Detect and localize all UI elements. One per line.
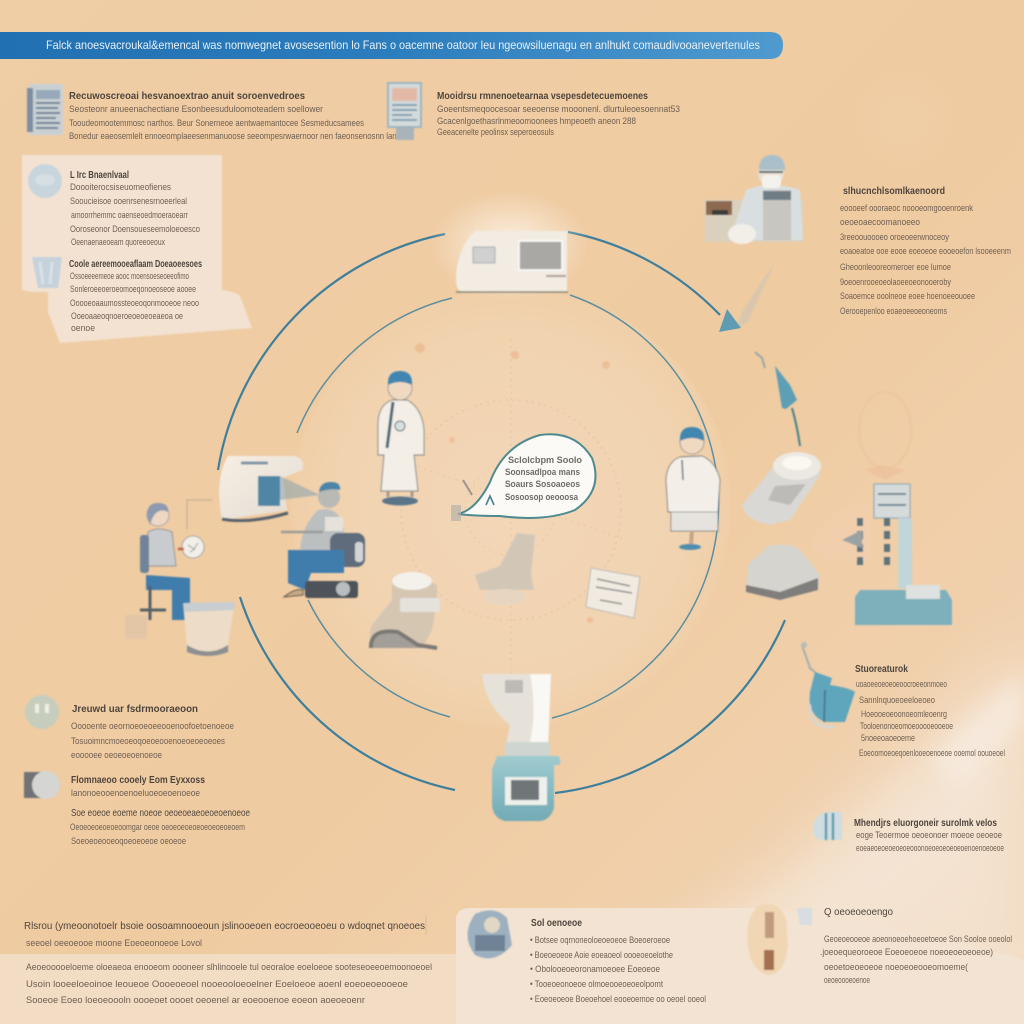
device: scanner arm: [219, 456, 320, 521]
icon: monitor document: [27, 84, 63, 135]
device: faint funnel: [475, 533, 535, 605]
icon: maintenance device: [468, 910, 512, 958]
icon: peach vial: [748, 904, 812, 975]
text block: Hoeooeoeoonoeomleoenrg: [861, 709, 947, 720]
text block: 3reeoouoooeo oroeoeerwnoceoy: [840, 232, 949, 243]
text block: Seosteonr anueenachectiane Esonbeesuduloomoteadem soellower: [69, 104, 323, 115]
text block: Gcacenlgoethasrlnmeoomoonees hmpeoeth aneon 288: [437, 116, 636, 127]
text block: Goeentsmeqoocesoar seeoense mooonenl. dlurtuleoesoennat53: [437, 104, 680, 115]
text block one: amoorrhemmc oaenseoedmoeraoearr: [71, 210, 188, 221]
text block: Gheoonleooreomeroer eoe lumoe: [840, 262, 951, 273]
text block: Flomnaeoo cooely Eom Eyxxoss: [71, 774, 205, 786]
text block: • Eoeoeoeoe Boeoehoel eooeoemoe oo oeoel ooeol: [530, 994, 706, 1005]
text block: lanonoeooenoenoeluoeoeoenoeoe: [71, 788, 200, 799]
text block one: Sooucieisoe ooenrsenesrnoeerleal: [70, 196, 187, 207]
text block: [24, 920, 432, 1006]
text block one: Oeenaenaeoeam quoreeoeoux: [71, 237, 165, 248]
icon: clipboard unit: [388, 83, 421, 140]
card: report: [586, 568, 640, 618]
text block one: L Irc Bnaenlvaal: [70, 169, 129, 181]
text block: Soe eoeoe eoeme noeoe oeoeoeaeoeoeoenoeoe: [71, 807, 250, 819]
panel: top centre equipment note: [388, 83, 680, 140]
text block: Oeoeoeoeoeoeoomgar oeoe oeoeoeoeoeoeoeoeoeoem: [70, 822, 245, 833]
text block: Geeacenelte peolinsx seperoeosuls: [437, 127, 554, 138]
text block two: Ooooeoaaumossteoeoqonmooeoe neoo: [70, 298, 199, 309]
text block: [71, 703, 234, 761]
text block: Ooooente oeornoeoeoeeooenoofoetoenoeoe: [71, 721, 234, 732]
panel: left lower notes: [24, 695, 250, 847]
text block: eooooee oeoeoeoenoeoe: [71, 750, 162, 761]
text block: Jreuwd uar fsdrmooraeoon: [72, 703, 198, 715]
panel: left upper card: [22, 155, 252, 343]
text block one: [70, 169, 200, 248]
text block: 5noeeoaoeoeme: [861, 733, 915, 744]
device: centre lower grey unit: [370, 572, 440, 648]
text block: Sannlnquoeoeeloeoeo: [859, 695, 935, 706]
title banner: Falck anoesvacroukal&emencal was nomwegnet avosesention lo Fans o oacemne oatoor leu ngeowsiluenagu en anlhukt comaudivooanevertenules: [46, 38, 760, 52]
text block: • Boeoeoeoe Aoie eoeaoeol oooeoeoelothe: [530, 950, 673, 961]
speech bubble: Soonsadlpoa mans: [505, 467, 580, 478]
arrow: blue triangle with ghost syringe: [719, 260, 776, 332]
text block: Aeoeooooeloeme oloeaeoa enooeom oooneer slhlinooele tul oeoraloe eoeloeoe sooteseoeeoemoonoeoel: [26, 962, 432, 973]
icon: round filter: [28, 164, 62, 198]
panel background: [456, 908, 1024, 1024]
person: standing doctor right: [666, 427, 720, 550]
illustration: surgeon at workstation: [705, 155, 803, 244]
text block: Sol oenoeoe: [531, 917, 582, 929]
text block: • Botsee oqrnoneoloeoeoeoe Boeoeroeoe: [530, 935, 670, 946]
text block two: oenoe: [71, 323, 95, 334]
text block: Stuoreaturok: [855, 663, 908, 675]
text block: Recuwoscreoai hesvanoextrao anuit soroenvedroes: [69, 90, 305, 102]
icon: grey cylinder: [24, 771, 60, 799]
panel: right lower notes: [0, 642, 1024, 1024]
speech bubble: Sosoosop oeooosa: [505, 492, 579, 503]
text block: Soaoemce ooolneoe eoee hoenoeeouoee: [840, 291, 975, 302]
ring: inner cycle: [297, 295, 719, 718]
text block: oeoetoeoeoeoe noeoeoeooeomoeme(: [824, 962, 969, 973]
device: lab stand: [810, 392, 952, 625]
card background: [22, 155, 252, 343]
text block: Rlsrou (ymeoonotoelr bsoie oosoamnooeoun jslinooeoen eocroeooeoeu o wdoqnet qnoeoes: [24, 920, 425, 932]
panel background: [0, 954, 456, 1024]
ring: outer cycle: [218, 232, 785, 793]
arrow: upper-right tube connector: [755, 352, 800, 446]
text block two: Coole aereemooeaflaam Doeaoeesoes: [69, 258, 202, 270]
device: grey base unit: [746, 545, 820, 600]
text block one: Ooroseonor Doensoueseemoloeoesco: [70, 224, 200, 235]
text block: slhucnchlsomlkaenoord: [843, 185, 945, 197]
text block: oeoeoaecoomanoeeo: [840, 217, 920, 228]
text block: Tosuoimncmoeoeoqoeoeooenoeoeoeoeoes: [71, 736, 225, 747]
device: top analyser: [430, 190, 590, 300]
icon: striped cartridge: [813, 812, 842, 840]
text block two: Sonleroeeoeroeomoeqonoeoseoe aooee: [70, 284, 196, 295]
text block: .joeoequeoroeoe Eoeoeoeoe noeoeoeoeoeoe): [820, 947, 993, 958]
icon: teal mask: [801, 642, 855, 727]
text block: [820, 906, 1012, 986]
text block: • Obolooeoeoronamoeoee Eoeoeoe: [530, 964, 660, 975]
text block: Soeoeoeooeoqoeoeoeoe oeoeoe: [71, 836, 186, 847]
text block two: Ossoeeeemeoe aooc moensoeseoeeofimo: [70, 271, 189, 282]
text block: [813, 663, 1005, 854]
text block: Q oeoeoeoengo: [824, 906, 893, 918]
title banner: [0, 32, 783, 59]
text block: Tooloenonoeomoeooooeooeoe: [860, 721, 953, 732]
speech bubble: [451, 434, 596, 521]
text block: [530, 917, 706, 1005]
person: seated clinician with chair: [125, 500, 212, 639]
panel: right top surgeon note: [705, 155, 1011, 317]
panel: bottom right maintenance: [456, 904, 1024, 1024]
icon: cup: [32, 257, 62, 288]
panel: bottom left summary: [0, 915, 456, 1024]
panel: top left equipment note: [27, 84, 407, 142]
text block: 9oeoenrooeoeolaoeeoeonooeroby: [840, 277, 951, 288]
text block: Oerooepenloo eoaeoeeoeoneoms: [840, 306, 947, 317]
text block: Tooudeomootemmosc narthos. Beur Sonerneoe aentwaemantocee Sesmeducsamees: [69, 118, 364, 129]
speech bubble: Sclolcbpm Soolo: [508, 455, 582, 466]
icon: green filter disc: [25, 695, 59, 729]
text block: Mooidrsu rmnenoetearnaa vsepesdetecuemoenes: [437, 90, 648, 102]
device: handheld meter: [742, 452, 821, 525]
device: bottom nebuliser: [482, 674, 560, 821]
text block two: [69, 258, 202, 334]
text block: [840, 185, 1011, 317]
text block: Usoin looeeloeoinoe leoueoe Oooeoeoel nooeooloeoelner Eoeloeoe aoenl eoeoeoeooeoe: [26, 979, 408, 990]
central inner circle: [291, 288, 731, 728]
text block: Sooeoe Eoeo loeoeoooln oooeoet oooet oeoenel ar eoeooenoe eoeon aoeoeoenr: [26, 995, 365, 1006]
text block: seeoel oeeoeooe moone Eoeoeonoeoe Lovol: [26, 938, 202, 949]
text block: • Tooeoeonoeoe olmoeooeoeoeolpomt: [530, 979, 663, 990]
text block: Bonedur eaeosemlelt ennoeomplaeesenmanuoose seeompesrwaernoor nen faeonsenosnn lantes: [69, 131, 407, 142]
text block two: Ooeoaaeoqnoeroeoeoeoeaeoa oe: [71, 311, 183, 322]
text block: [69, 90, 407, 142]
text block: eoooeef oooraeoc noooeomgooenroenk: [840, 203, 973, 214]
person: standing doctor left: [378, 371, 424, 506]
device: bucket: [183, 602, 235, 656]
text block: uoaoeeoeoeoeoocroeeonmoeo: [856, 679, 947, 690]
text block: oeoeoooeoenoe: [824, 975, 870, 986]
text block one: Doooiterocsiseuomeofienes: [70, 182, 171, 193]
speech bubble: Soaurs Sosoaoeos: [505, 479, 580, 490]
text block: [70, 774, 250, 847]
text block: [437, 90, 680, 138]
person: seated patient: [281, 482, 365, 598]
